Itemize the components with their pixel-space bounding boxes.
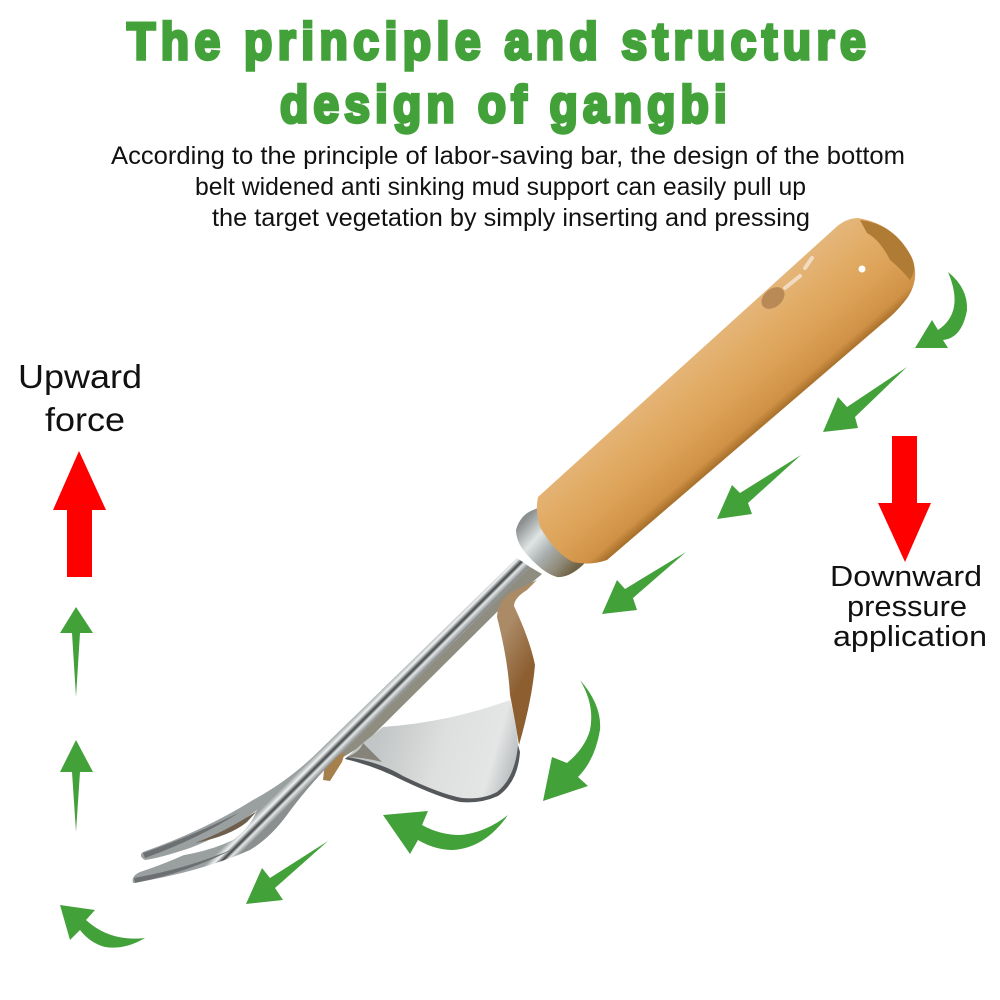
description text: belt widened anti sinking mud support can easily pull up bbox=[195, 173, 806, 201]
tool wooden handle bbox=[537, 218, 915, 564]
label: downward pressure application: Downward bbox=[830, 561, 982, 593]
description text: the target vegetation by simply inserting and pressing bbox=[212, 204, 810, 232]
arrow: red downward pressure bbox=[878, 436, 931, 562]
arrow: green diagonal 1 bbox=[823, 367, 907, 432]
tool shaft and fork tines bbox=[133, 558, 530, 883]
tool illustration: hand weeder bbox=[133, 218, 915, 883]
title bbox=[127, 13, 866, 134]
tool blade support bbox=[323, 567, 542, 802]
label: upward force: Upward bbox=[18, 358, 142, 395]
description text: According to the principle of labor-saving bar, the design of the bottom bbox=[111, 142, 905, 170]
tool metal collar bbox=[516, 505, 585, 577]
arrow: green diagonal 4 bbox=[246, 841, 328, 904]
description text bbox=[111, 142, 905, 232]
arrow: green upward 1 bbox=[60, 740, 93, 832]
label: upward force: force bbox=[45, 401, 125, 438]
arrow: curved green, top right bbox=[915, 272, 967, 348]
arrow: large curved green, right of blade bbox=[543, 680, 600, 801]
title: design of gangbi bbox=[280, 76, 727, 134]
label: downward pressure application: pressure bbox=[847, 591, 967, 623]
label: downward pressure application: application bbox=[833, 621, 987, 653]
arrow: green diagonal 3 bbox=[602, 552, 686, 614]
label: downward pressure application bbox=[830, 561, 987, 653]
arrow: curved green, bottom left bbox=[60, 905, 145, 948]
label: upward force bbox=[18, 358, 142, 438]
arrow: curved green, under blade bbox=[383, 811, 508, 854]
title: The principle and structure bbox=[127, 13, 866, 71]
arrow: red upward force bbox=[53, 451, 106, 577]
arrow: green upward 2 bbox=[60, 607, 93, 697]
arrow: green diagonal 2 bbox=[717, 455, 801, 519]
